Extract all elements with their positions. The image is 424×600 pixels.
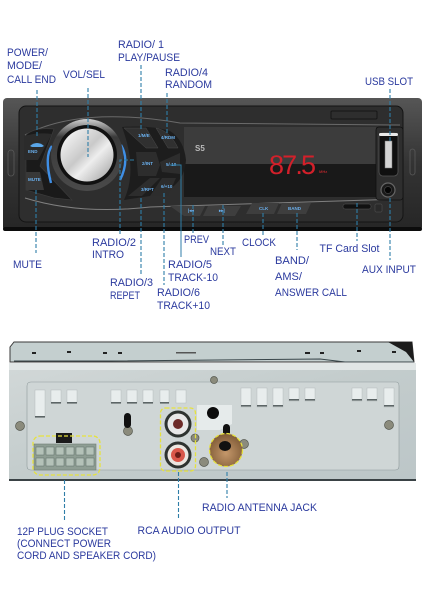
label: power: POWER/	[7, 47, 49, 59]
label: mute: MUTE	[13, 259, 42, 271]
label: band: BAND/	[275, 255, 310, 267]
label: radio 4: RADIO/4	[165, 67, 208, 79]
preset button 4	[156, 128, 178, 148]
label: RCA: RCA AUDIO OUTPUT	[138, 525, 241, 537]
vent tabs	[35, 388, 394, 417]
label: power	[7, 47, 56, 86]
label: radio 1: PLAY/PAUSE	[118, 52, 180, 64]
label: 12P socket: 12P PLUG SOCKET	[17, 526, 108, 538]
display	[184, 127, 376, 197]
preset button 1	[124, 128, 158, 148]
lower button row: ▸▸|	[218, 208, 225, 213]
screws	[16, 376, 394, 466]
label: USB slot: USB SLOT	[365, 76, 413, 88]
label: radio 3	[110, 277, 153, 302]
label: radio 4: RANDOM	[165, 79, 212, 91]
slots and holes	[124, 413, 131, 428]
top plate	[10, 342, 414, 362]
preset button 3: 3/RPT	[141, 187, 154, 192]
label: radio 1	[118, 39, 180, 64]
rear face	[9, 363, 416, 481]
lower button row: CLK	[259, 206, 269, 211]
label: antenna: RADIO ANTENNA JACK	[202, 502, 318, 514]
recessed panel	[27, 382, 399, 470]
label: radio 2: RADIO/2	[92, 237, 136, 249]
RCA outputs	[160, 408, 196, 471]
preset button 6: 6/+10	[161, 184, 173, 189]
label: radio 2	[92, 237, 136, 261]
label: radio 2: INTRO	[92, 249, 124, 261]
top slot	[331, 111, 377, 119]
TF card slot	[343, 204, 382, 212]
leader lines	[36, 65, 390, 522]
lower button row	[170, 203, 311, 216]
label: radio 3: RADIO/3	[110, 277, 153, 289]
label: 12P socket: (CONNECT POWER	[17, 538, 111, 550]
label: power: CALL END	[7, 74, 56, 86]
label: volume: VOL/SEL	[63, 69, 105, 81]
panel: front of head unit	[3, 98, 422, 231]
label: aux: AUX INPUT	[362, 264, 416, 276]
label: band: ANSWER CALL	[275, 287, 347, 299]
label: radio 3: REPET	[110, 290, 140, 302]
left button cluster	[26, 129, 72, 200]
label: band: AMS/	[275, 271, 303, 283]
label: radio 6	[157, 287, 210, 312]
label: next: NEXT	[210, 246, 236, 258]
USB and AUX bay	[376, 127, 403, 200]
antenna jack	[210, 434, 242, 466]
label: radio 5	[168, 259, 218, 284]
panel: rear of head unit	[9, 342, 416, 481]
preset button 5	[160, 153, 180, 174]
label: TF card: TF Card Slot	[320, 243, 380, 255]
preset button 1: 1/M/E	[138, 133, 150, 138]
mute button	[26, 172, 44, 190]
label: clock: CLOCK	[242, 237, 277, 249]
label: radio 1: RADIO/ 1	[118, 39, 164, 51]
label: radio 4	[165, 67, 212, 91]
label: prev: PREV	[184, 234, 210, 246]
label: 12P socket: CORD AND SPEAKER CORD)	[17, 550, 156, 562]
preset button 6	[150, 178, 176, 196]
volume knob	[48, 119, 125, 191]
lower button row: |◂◂	[188, 208, 195, 213]
preset button 3	[128, 178, 160, 196]
label: band	[275, 255, 347, 299]
lower button row: BAND	[288, 206, 302, 211]
label: radio 5: RADIO/5	[168, 259, 212, 271]
label: radio 5: TRACK-10	[168, 272, 218, 284]
unit: MHz	[319, 169, 327, 174]
label: 12P socket	[17, 526, 156, 562]
mute button: MUTE	[28, 177, 41, 182]
label: radio 6: RADIO/6	[157, 287, 200, 299]
preset button 5: 5/-10	[166, 162, 177, 167]
preset button 4: 4/RDM	[161, 135, 175, 140]
power button: END	[28, 149, 38, 154]
source icon: S5	[195, 144, 205, 153]
frequency readout: 87.5	[269, 150, 316, 180]
label: radio 6: TRACK+10	[157, 300, 210, 312]
power button	[24, 133, 52, 160]
preset button 2: 2/INT	[142, 161, 153, 166]
12P plug socket	[33, 433, 100, 475]
preset button 2	[136, 152, 160, 176]
label: power: MODE/	[7, 60, 43, 72]
